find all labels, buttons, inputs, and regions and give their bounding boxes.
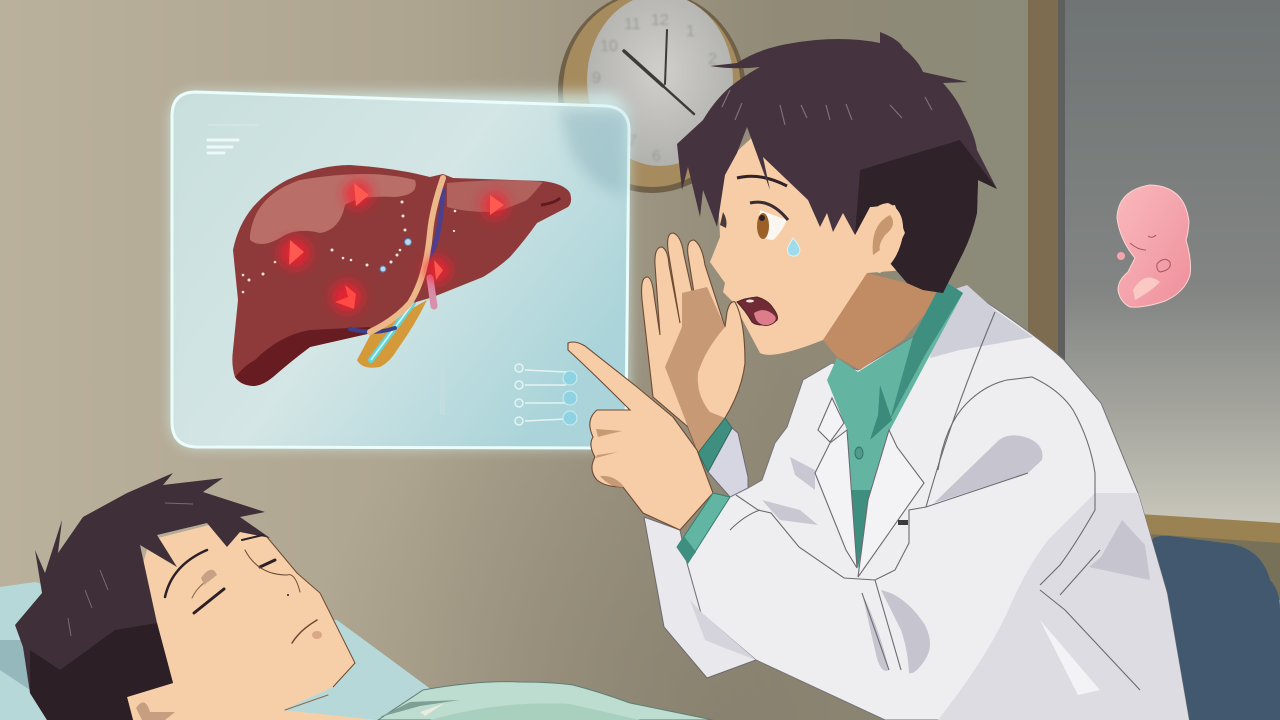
shirt button <box>855 447 863 459</box>
mouth <box>737 297 778 325</box>
raised arm sleeve <box>708 428 748 500</box>
neck <box>823 273 943 370</box>
clock shadow through the panel <box>560 110 626 195</box>
coat lines <box>730 312 1140 690</box>
wainscot rail <box>1140 514 1280 600</box>
clock numerals: 7 <box>628 133 637 150</box>
neck and face <box>120 523 377 720</box>
patient <box>0 473 713 720</box>
doctor <box>568 32 1189 720</box>
lesion markers <box>280 180 508 312</box>
pointing hand <box>568 342 713 530</box>
blanket <box>378 682 713 720</box>
clock <box>558 0 746 193</box>
grey side panel <box>1065 0 1280 530</box>
lab coat <box>687 287 1189 720</box>
clock numerals <box>592 12 717 165</box>
pointing hand cuff <box>677 493 730 563</box>
lapels <box>815 398 924 577</box>
door frame <box>1028 0 1066 360</box>
blue chair <box>1152 536 1280 720</box>
hair <box>15 473 270 720</box>
raised hand <box>642 233 745 453</box>
panel: holographic display <box>172 92 629 448</box>
icon: liver <box>232 165 571 386</box>
ear <box>128 688 183 720</box>
pillow <box>0 582 432 720</box>
shirt <box>827 280 963 568</box>
clock numerals: 2 <box>708 51 717 68</box>
lower shadow <box>235 327 372 386</box>
clock numerals: 6 <box>652 148 661 165</box>
raised hand cuff <box>698 418 732 472</box>
pen in pocket <box>898 520 908 525</box>
clock hands <box>624 30 694 114</box>
clock numerals: 1 <box>686 23 695 40</box>
hair <box>677 32 997 293</box>
liver body <box>232 165 571 386</box>
dotted paths <box>242 200 456 293</box>
clock numerals: 9 <box>592 70 601 87</box>
coat shading <box>690 285 1189 720</box>
clock numerals: 10 <box>600 38 618 55</box>
gallbladder <box>357 300 427 368</box>
ligament vessels <box>350 178 443 332</box>
data rows <box>515 364 577 425</box>
wall shading <box>200 300 1040 720</box>
tear <box>788 238 800 256</box>
ear <box>868 203 903 273</box>
clock numerals: 11 <box>624 16 641 33</box>
face <box>710 130 930 355</box>
other arm sleeve <box>644 517 756 678</box>
icon: fetus <box>1117 185 1190 307</box>
menu lines <box>208 125 258 153</box>
clock numerals: 12 <box>651 12 669 29</box>
closed eyes and features <box>155 535 328 710</box>
eye <box>720 176 788 240</box>
highlights <box>250 174 416 244</box>
